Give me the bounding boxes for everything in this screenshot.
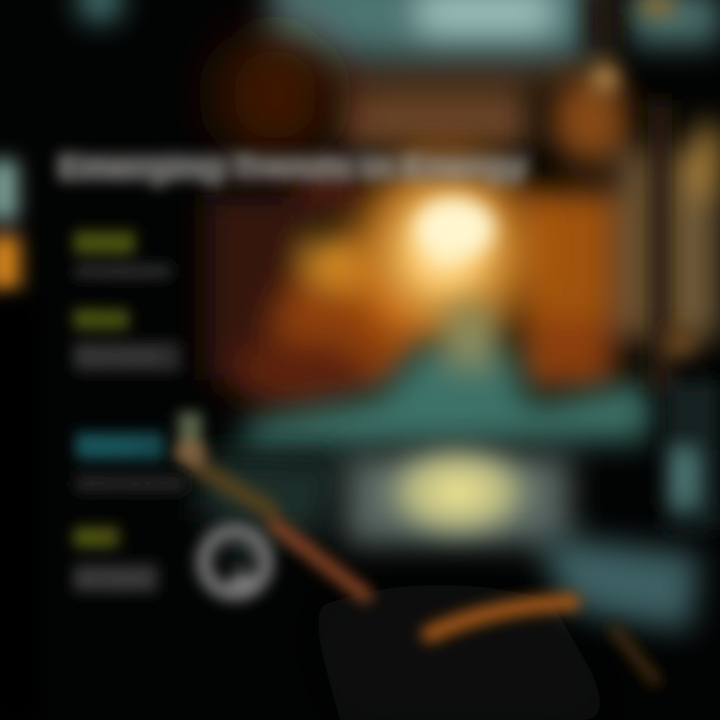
sun glow	[330, 130, 560, 370]
river mid teal	[235, 305, 650, 450]
left dark panel	[0, 300, 40, 720]
item 1: Growing fast	[74, 264, 166, 281]
icon: circular ring	[204, 531, 266, 593]
item 3: Hydro systems	[74, 476, 182, 493]
item 4	[72, 525, 158, 592]
right tree foliage orange	[520, 75, 720, 390]
item 2: Wind	[72, 307, 130, 334]
left tree foliage orange brown	[205, 175, 425, 410]
dark tree trunks right	[588, 0, 720, 530]
title: Emerging Trends in Energy	[56, 147, 526, 188]
left edge glow	[0, 160, 20, 290]
item 3: Water	[74, 433, 140, 460]
item 2: Clean power	[72, 347, 161, 364]
upper forest dark tree	[215, 30, 335, 160]
item 1	[72, 230, 172, 281]
orange foreground streaks	[173, 412, 655, 680]
item 3	[74, 432, 186, 493]
item 1: Solar	[72, 231, 132, 258]
mid bank dark	[200, 455, 340, 540]
sky	[80, 0, 720, 150]
item 4: Net	[72, 525, 111, 552]
item 4: Zero goals	[72, 571, 148, 588]
water reflection	[345, 437, 700, 630]
item 2	[72, 307, 180, 372]
foreground dark bank	[310, 585, 620, 720]
